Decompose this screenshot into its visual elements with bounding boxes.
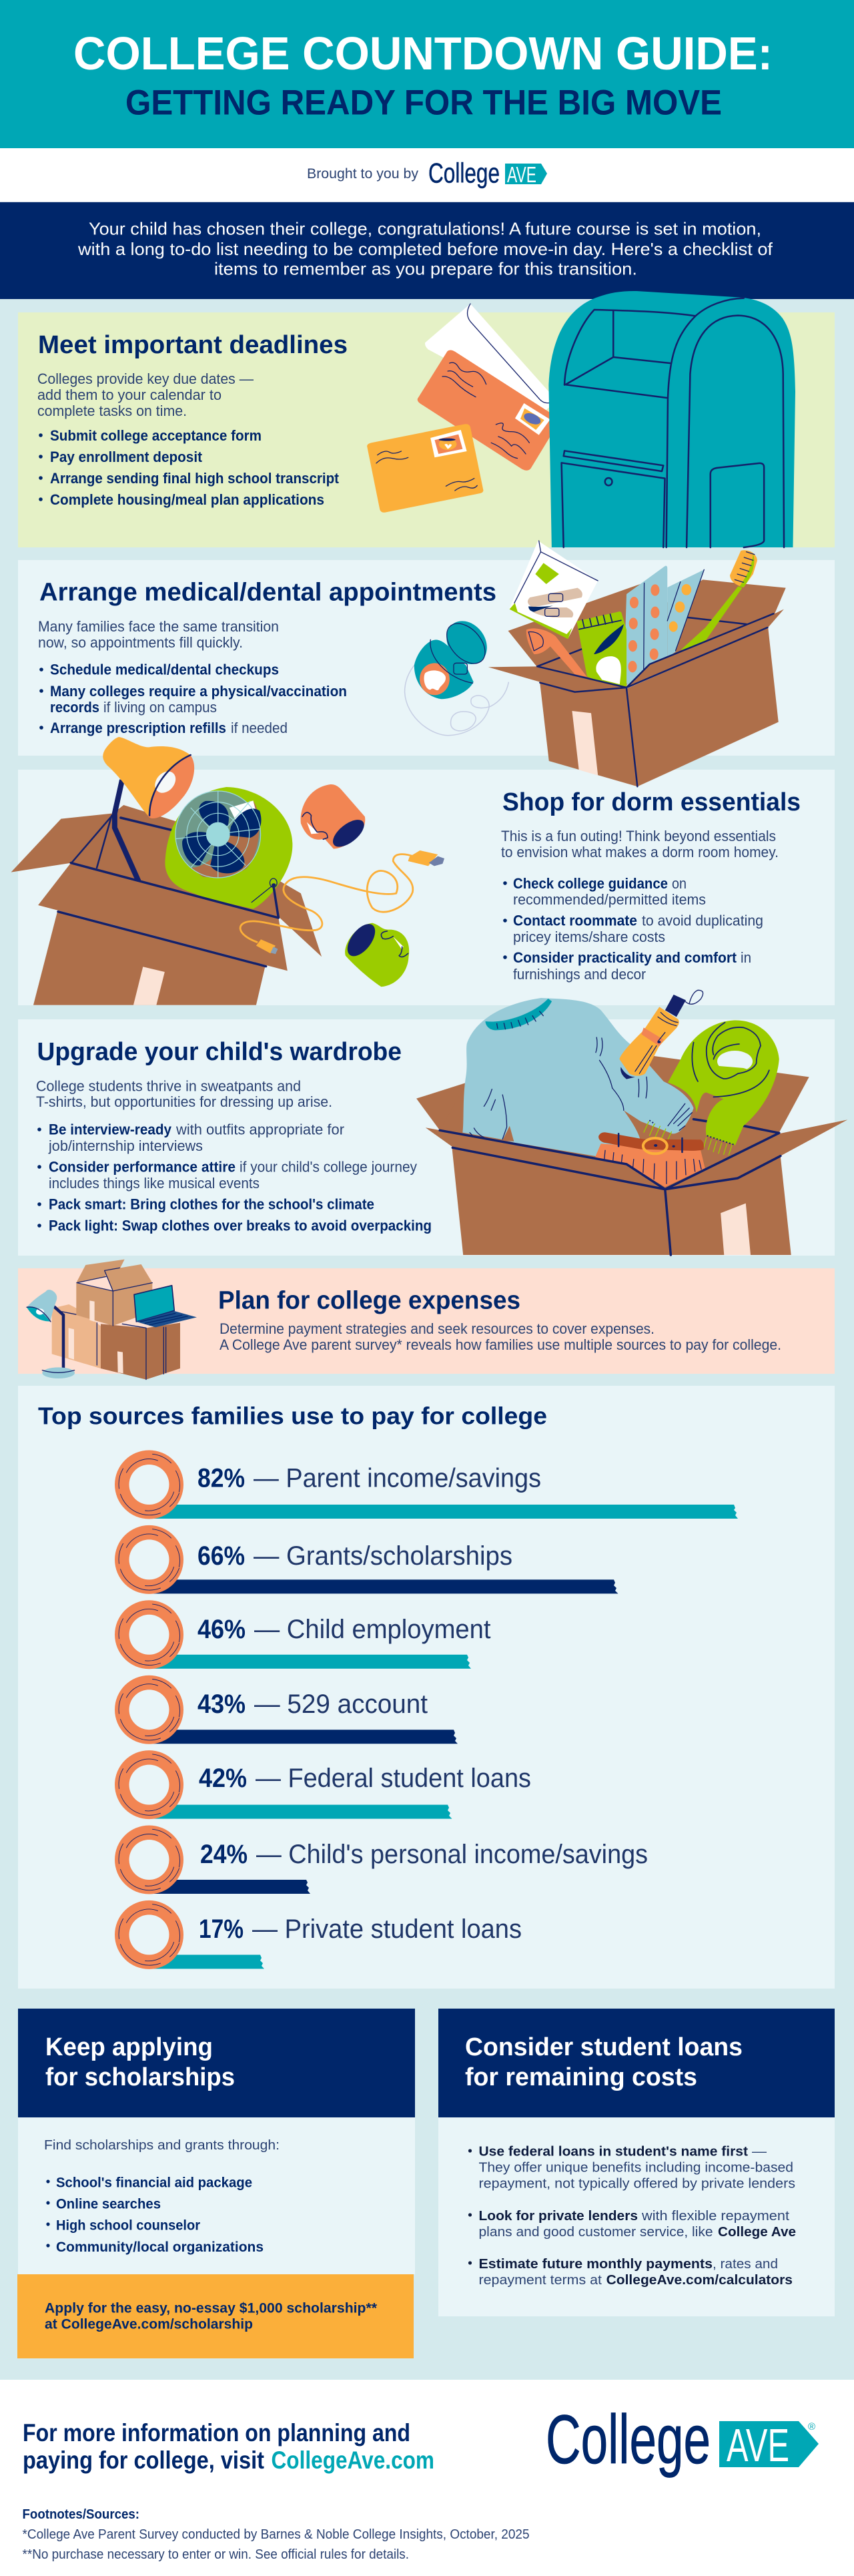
card heading [45, 2033, 235, 2091]
row: 17%: 17% [199, 1914, 244, 1944]
checklist: job/internship interviews [48, 1137, 203, 1154]
scarf [644, 1020, 779, 1155]
footer call to action: paying for college, visit [23, 2446, 264, 2474]
intro text: to envision what makes a dorm room homey. [501, 844, 779, 860]
intro text: T-shirts, but opportunities for dressing up arise. [36, 1093, 332, 1110]
checklist: if your child's college journey [240, 1158, 417, 1175]
row: 66%: — Grants/scholarships [254, 1541, 512, 1571]
checklist: Arrange sending final high school transcript [50, 470, 340, 487]
checklist [39, 427, 340, 508]
list: plans and good customer service, like [479, 2225, 713, 2240]
checklist: on [672, 875, 687, 892]
intro text [38, 618, 279, 651]
intro band: Your child has chosen their college, congratulations! A future course is set in motion, [89, 219, 761, 239]
callout: scholarship: at CollegeAve.com/scholarship [45, 2317, 253, 2332]
illustration: clothes box [416, 990, 847, 1255]
card heading: Consider student loans [465, 2033, 743, 2061]
intro text [37, 370, 254, 419]
list: , rates and [713, 2257, 778, 2272]
card heading [465, 2033, 743, 2091]
checklist: Consider practicality and comfort [513, 949, 737, 966]
lamp [54, 1306, 63, 1370]
list [46, 2175, 264, 2255]
intro text: College students thrive in sweatpants and [36, 1077, 301, 1094]
panel: medical [38, 541, 786, 786]
description [220, 1320, 781, 1353]
list: — [752, 2144, 767, 2159]
illustration: envelopes [367, 304, 559, 513]
list: CollegeAve.com/calculators [606, 2273, 793, 2288]
callout: scholarship [17, 2274, 414, 2358]
list: College Ave [718, 2225, 796, 2240]
lamp [71, 737, 194, 881]
panel background: dorm [18, 770, 835, 1005]
row: 82%: — Parent income/savings [254, 1464, 541, 1493]
skirt and belt [595, 1132, 705, 1187]
description: Determine payment strategies and seek resources to cover expenses. [220, 1320, 655, 1337]
row: 42%: 42% [199, 1764, 247, 1793]
checklist: Be interview-ready [49, 1121, 172, 1138]
panel background: expenses [18, 1268, 835, 1374]
lower right box [101, 1323, 180, 1380]
checklist: Submit college acceptance form [50, 427, 262, 444]
intro band: with a long to-do list needing to be completed before move-in day. Here's a checklist of [77, 239, 773, 259]
row: 82% [115, 1450, 738, 1519]
footer logo: College [546, 2401, 711, 2479]
checklist: Pay enrollment deposit [50, 449, 203, 465]
heading: Top sources families use to pay for college [38, 1402, 547, 1430]
checklist: with outfits appropriate for [175, 1121, 344, 1138]
row: 46% [115, 1600, 491, 1669]
header banner [0, 0, 854, 148]
list: Community/local organizations [56, 2240, 264, 2255]
illustration: floss [405, 616, 508, 736]
top box [76, 1283, 113, 1326]
card: student loans [438, 2009, 835, 2316]
card heading: for scholarships [45, 2063, 235, 2091]
row: 43% [115, 1676, 458, 1744]
checklist: if needed [231, 720, 288, 736]
illustration: dorm box [11, 737, 444, 1005]
panel: wardrobe [36, 990, 847, 1255]
list: Online searches [56, 2197, 161, 2212]
card: scholarships [17, 2009, 415, 2358]
list: Use federal loans in student's name first [479, 2144, 748, 2159]
checklist: in [741, 949, 751, 966]
row: 42%: — Federal student loans [256, 1764, 531, 1793]
panel background: wardrobe [18, 1019, 835, 1256]
checklist: recommended/permitted items [513, 891, 706, 908]
row: 24% [115, 1825, 648, 1894]
panel background: deadlines [18, 312, 835, 547]
list: repayment, not typically offered by private lenders [479, 2177, 795, 2192]
checklist [39, 662, 347, 736]
intro text: complete tasks on time. [37, 403, 187, 419]
checklist: pricey items/share costs [513, 929, 665, 945]
intro text: now, so appointments fill quickly. [38, 634, 243, 651]
list: High school counselor [56, 2218, 200, 2234]
toothpaste tube [576, 611, 626, 686]
footer logo: ® [808, 2421, 815, 2432]
mug: green [342, 921, 409, 987]
box body [540, 683, 637, 786]
checklist: furnishings and decor [513, 966, 646, 983]
box body [452, 1148, 671, 1255]
card heading: Keep applying [45, 2033, 213, 2061]
intro band [0, 202, 854, 299]
row: 46%: — Child employment [254, 1615, 491, 1644]
footnotes: Footnotes/Sources: [23, 2507, 139, 2522]
small logo: AVE [507, 162, 536, 187]
checklist: includes things like musical events [49, 1175, 260, 1192]
title: COLLEGE COUNTDOWN GUIDE: [73, 27, 773, 79]
bandage box [510, 541, 598, 639]
row: 24%: 24% [200, 1840, 248, 1869]
row: 17% [115, 1900, 522, 1969]
umbrella [619, 990, 703, 1079]
intro band: items to remember as you prepare for this transition. [214, 259, 637, 279]
checklist: Pack smart: Bring clothes for the school's climate [49, 1196, 374, 1213]
row: 43%: — 529 account [254, 1690, 428, 1719]
brought to you by: Brought to you by [307, 166, 419, 182]
list: School's financial aid package [56, 2175, 252, 2191]
panel background: sources [18, 1386, 835, 1989]
list: Look for private lenders [479, 2209, 638, 2224]
row: 43%: 43% [197, 1690, 246, 1719]
heading: Upgrade your child's wardrobe [37, 1038, 402, 1066]
footnotes [23, 2507, 530, 2562]
row: 24%: — Child's personal income/savings [256, 1840, 648, 1869]
intro text: add them to your calendar to [37, 387, 222, 403]
footnotes: **No purchase necessary to enter or win. See official rules for details. [23, 2547, 409, 2562]
footer logo: AVE [727, 2419, 789, 2471]
callout: scholarship: Apply for the easy, no-essay $1,000 scholarship** [45, 2301, 378, 2316]
intro text [36, 1077, 332, 1110]
sponsor strip [0, 148, 854, 202]
heading: Shop for dorm essentials [502, 788, 801, 816]
checklist: records [50, 699, 99, 716]
lead text: Find scholarships and grants through: [44, 2138, 280, 2153]
checklist: if living on campus [103, 699, 217, 716]
small logo: College [428, 158, 500, 188]
intro text: Colleges provide key due dates — [37, 370, 254, 387]
checklist: Schedule medical/dental checkups [50, 662, 279, 678]
panel background: medical [18, 560, 835, 756]
checklist: Check college guidance [513, 875, 668, 892]
card heading: for remaining costs [465, 2063, 697, 2091]
mug: coral [301, 784, 370, 850]
illustration: mailbox [548, 291, 795, 547]
row: 82%: 82% [197, 1464, 245, 1493]
list: repayment terms at [479, 2273, 602, 2288]
heading: Plan for college expenses [218, 1287, 520, 1315]
checklist: Arrange prescription refills [50, 720, 226, 736]
footer call to action [23, 2419, 434, 2474]
checklist [37, 1121, 432, 1234]
footer call to action: For more information on planning and [23, 2419, 410, 2446]
illustration: medical box [488, 541, 786, 786]
checklist: Pack light: Swap clothes over breaks to avoid overpacking [49, 1218, 432, 1234]
heading: Meet important deadlines [38, 331, 348, 359]
list: Estimate future monthly payments [479, 2257, 713, 2272]
row: 66% [115, 1525, 618, 1594]
heading: Arrange medical/dental appointments [39, 578, 496, 606]
panel: top sources chart [38, 1402, 738, 1969]
row: 17%: — Private student loans [252, 1914, 522, 1944]
sweater [462, 998, 694, 1157]
panel: dorm [11, 737, 801, 1005]
footer call to action: CollegeAve.com [271, 2446, 434, 2474]
pill packs [624, 566, 704, 686]
subtitle: GETTING READY FOR THE BIG MOVE [125, 83, 722, 123]
checklist: to avoid duplicating [642, 912, 763, 929]
list [468, 2144, 796, 2288]
checklist: Many colleges require a physical/vaccination [50, 683, 347, 700]
row: 42% [115, 1750, 531, 1819]
panel: expenses [27, 1260, 781, 1380]
checklist: Contact roommate [513, 912, 637, 929]
list: They offer unique benefits including income-based [479, 2161, 793, 2175]
fan [165, 787, 292, 909]
checklist [503, 875, 763, 983]
laptop [134, 1286, 174, 1322]
description: A College Ave parent survey* reveals how families use multiple sources to pay for college. [220, 1336, 781, 1353]
usb plugs [256, 850, 444, 954]
panel: deadlines [37, 291, 795, 547]
list: with flexible repayment [641, 2209, 789, 2224]
lower left box [52, 1304, 101, 1368]
row: 46%: 46% [197, 1615, 246, 1644]
illustration: moving boxes [27, 1260, 197, 1380]
intro text: This is a fun outing! Think beyond essentials [501, 828, 776, 844]
box body [33, 911, 265, 1005]
checklist: Complete housing/meal plan applications [50, 491, 324, 508]
cable [240, 854, 414, 943]
intro text: Many families face the same transition [38, 618, 279, 635]
row: 66%: 66% [197, 1541, 245, 1571]
checklist: Consider performance attire [49, 1158, 236, 1175]
floss pick [526, 628, 587, 677]
intro text [501, 828, 779, 860]
toothbrush [681, 550, 757, 650]
footnotes: *College Ave Parent Survey conducted by Barnes & Noble College Insights, October, 2025 [23, 2527, 530, 2542]
